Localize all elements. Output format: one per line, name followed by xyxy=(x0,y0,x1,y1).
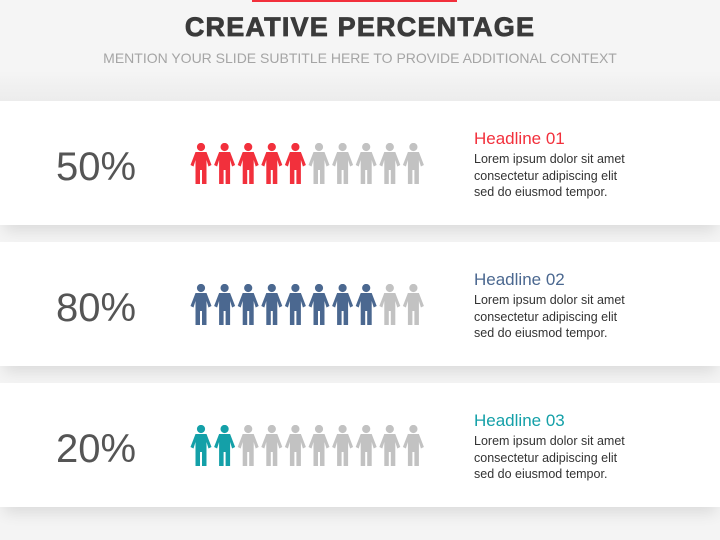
headline 03: Headline 03 xyxy=(474,411,565,430)
subtitle: MENTION YOUR SLIDE SUBTITLE HERE TO PROVIDE ADDITIONAL CONTEXT xyxy=(103,50,617,66)
panel: 20% xyxy=(0,383,720,507)
text 01 xyxy=(474,152,625,199)
people chart 20 xyxy=(190,425,424,466)
text 01: sed do eiusmod tempor. xyxy=(474,185,607,199)
text 02: consectetur adipiscing elit xyxy=(474,310,617,324)
people chart 50 xyxy=(190,143,424,184)
percentage 50: 50% xyxy=(56,145,136,189)
text 03: sed do eiusmod tempor. xyxy=(474,467,607,481)
text 02: Lorem ipsum dolor sit amet xyxy=(474,293,625,307)
header background shading xyxy=(0,0,720,101)
text 01: consectetur adipiscing elit xyxy=(474,168,617,182)
people chart 80 xyxy=(190,284,424,325)
text 03: consectetur adipiscing elit xyxy=(474,450,617,464)
text 03: Lorem ipsum dolor sit amet xyxy=(474,434,625,448)
text 02 xyxy=(474,293,625,340)
percentage 20: 20% xyxy=(56,427,136,471)
panel: 50% xyxy=(0,101,720,225)
top accent bar xyxy=(252,0,457,2)
text 03 xyxy=(474,434,625,481)
title: CREATIVE PERCENTAGE xyxy=(185,12,535,42)
percentage 80: 80% xyxy=(56,286,136,330)
text 02: sed do eiusmod tempor. xyxy=(474,326,607,340)
panel: 80% xyxy=(0,242,720,366)
headline 01: Headline 01 xyxy=(474,129,565,148)
text 01: Lorem ipsum dolor sit amet xyxy=(474,152,625,166)
headline 02: Headline 02 xyxy=(474,270,565,289)
